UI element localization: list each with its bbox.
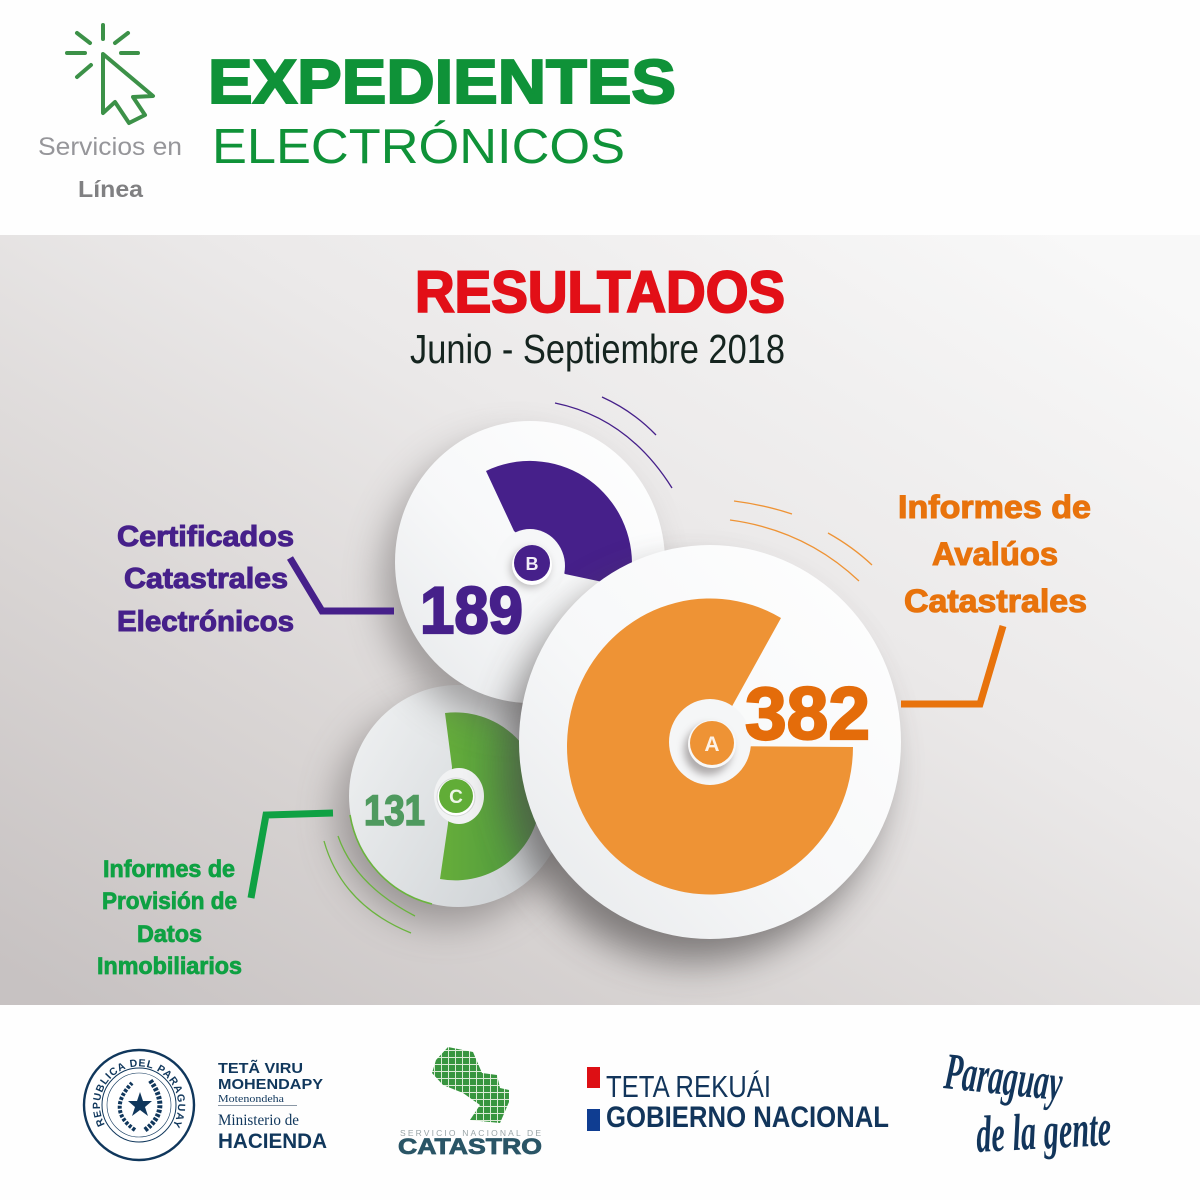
logo: seal: REPUBLICA DEL PARAGUAY [92, 1059, 186, 1128]
badge C [437, 778, 475, 816]
logo: catastro: CATASTRO [398, 1134, 542, 1159]
motion arcs: purple [555, 397, 672, 488]
panel: results [0, 235, 1200, 1005]
sector A [567, 598, 853, 894]
label: provision: Informes de [103, 856, 235, 883]
value 382: 382 [745, 672, 870, 755]
label: provision: Datos [137, 921, 202, 948]
motion arcs: green [324, 836, 415, 933]
logo: gobierno nacional [587, 1067, 889, 1134]
badge B: B [526, 554, 538, 574]
badge C: C [449, 787, 463, 808]
sector C [440, 712, 540, 880]
service label: Servicios en [38, 133, 182, 161]
connector: purple [290, 558, 394, 611]
label: avaluos: Informes de [898, 489, 1091, 525]
header [38, 25, 676, 202]
logo text: ministerio: Ministerio de [218, 1112, 299, 1129]
badge B [510, 545, 552, 588]
hub B [495, 529, 565, 603]
hub A [669, 699, 751, 785]
label: avaluos: Catastrales [904, 583, 1087, 619]
label: certificados: Catastrales [124, 563, 288, 595]
label: provision: Provisión de [102, 888, 237, 915]
logo: catastro: SERVICIO NACIONAL DE [400, 1128, 541, 1138]
badge A [684, 720, 736, 775]
title [208, 48, 676, 174]
service label [38, 133, 182, 202]
circle A: avaluos [504, 545, 901, 962]
motion arcs: orange [730, 501, 872, 581]
logo: seal [82, 1048, 196, 1162]
heading: resultados: Junio - Septiembre 2018 [410, 326, 785, 372]
icon: cursor click [67, 25, 153, 123]
value 131: 131 [364, 787, 425, 835]
footer logos [82, 1043, 1112, 1164]
value 189: 189 [420, 573, 523, 647]
label: certificados [117, 521, 394, 638]
circle C: provision de datos [336, 685, 567, 924]
label: certificados: Certificados [117, 521, 294, 553]
circle B: certificados [382, 421, 665, 722]
connector: green [251, 813, 333, 898]
logo: paraguay de la gente [941, 1043, 1112, 1164]
logo: gobierno nacional: GOBIERNO NACIONAL [606, 1101, 889, 1134]
label: provision [97, 813, 333, 980]
connector: orange [901, 626, 1003, 704]
badge A: A [704, 733, 720, 756]
logo text: ministerio: HACIENDA [218, 1130, 327, 1153]
title: EXPEDIENTES [208, 48, 676, 117]
logo text: ministerio: TETÃ VIRU [218, 1059, 303, 1077]
logo text: ministerio: MOHENDAPY [218, 1076, 323, 1093]
label: avaluos: Avalúos [932, 536, 1058, 572]
hub C [434, 768, 484, 824]
heading: resultados [410, 260, 785, 372]
sector B [486, 461, 640, 590]
logo: catastro [398, 1047, 542, 1159]
logo: paraguay de la gente: Paraguay [941, 1043, 1066, 1112]
service label: Línea [78, 176, 143, 202]
label: provision: Inmobiliarios [97, 953, 242, 980]
label: certificados: Electrónicos [117, 606, 294, 638]
logo text: ministerio [218, 1059, 327, 1153]
heading: resultados: RESULTADOS [415, 260, 785, 325]
logo text: ministerio: Motenondeha [218, 1093, 284, 1105]
title: ELECTRÓNICOS [212, 120, 625, 174]
logo: gobierno nacional: TETA REKUÁI [606, 1069, 771, 1104]
label: avaluos [898, 489, 1091, 704]
